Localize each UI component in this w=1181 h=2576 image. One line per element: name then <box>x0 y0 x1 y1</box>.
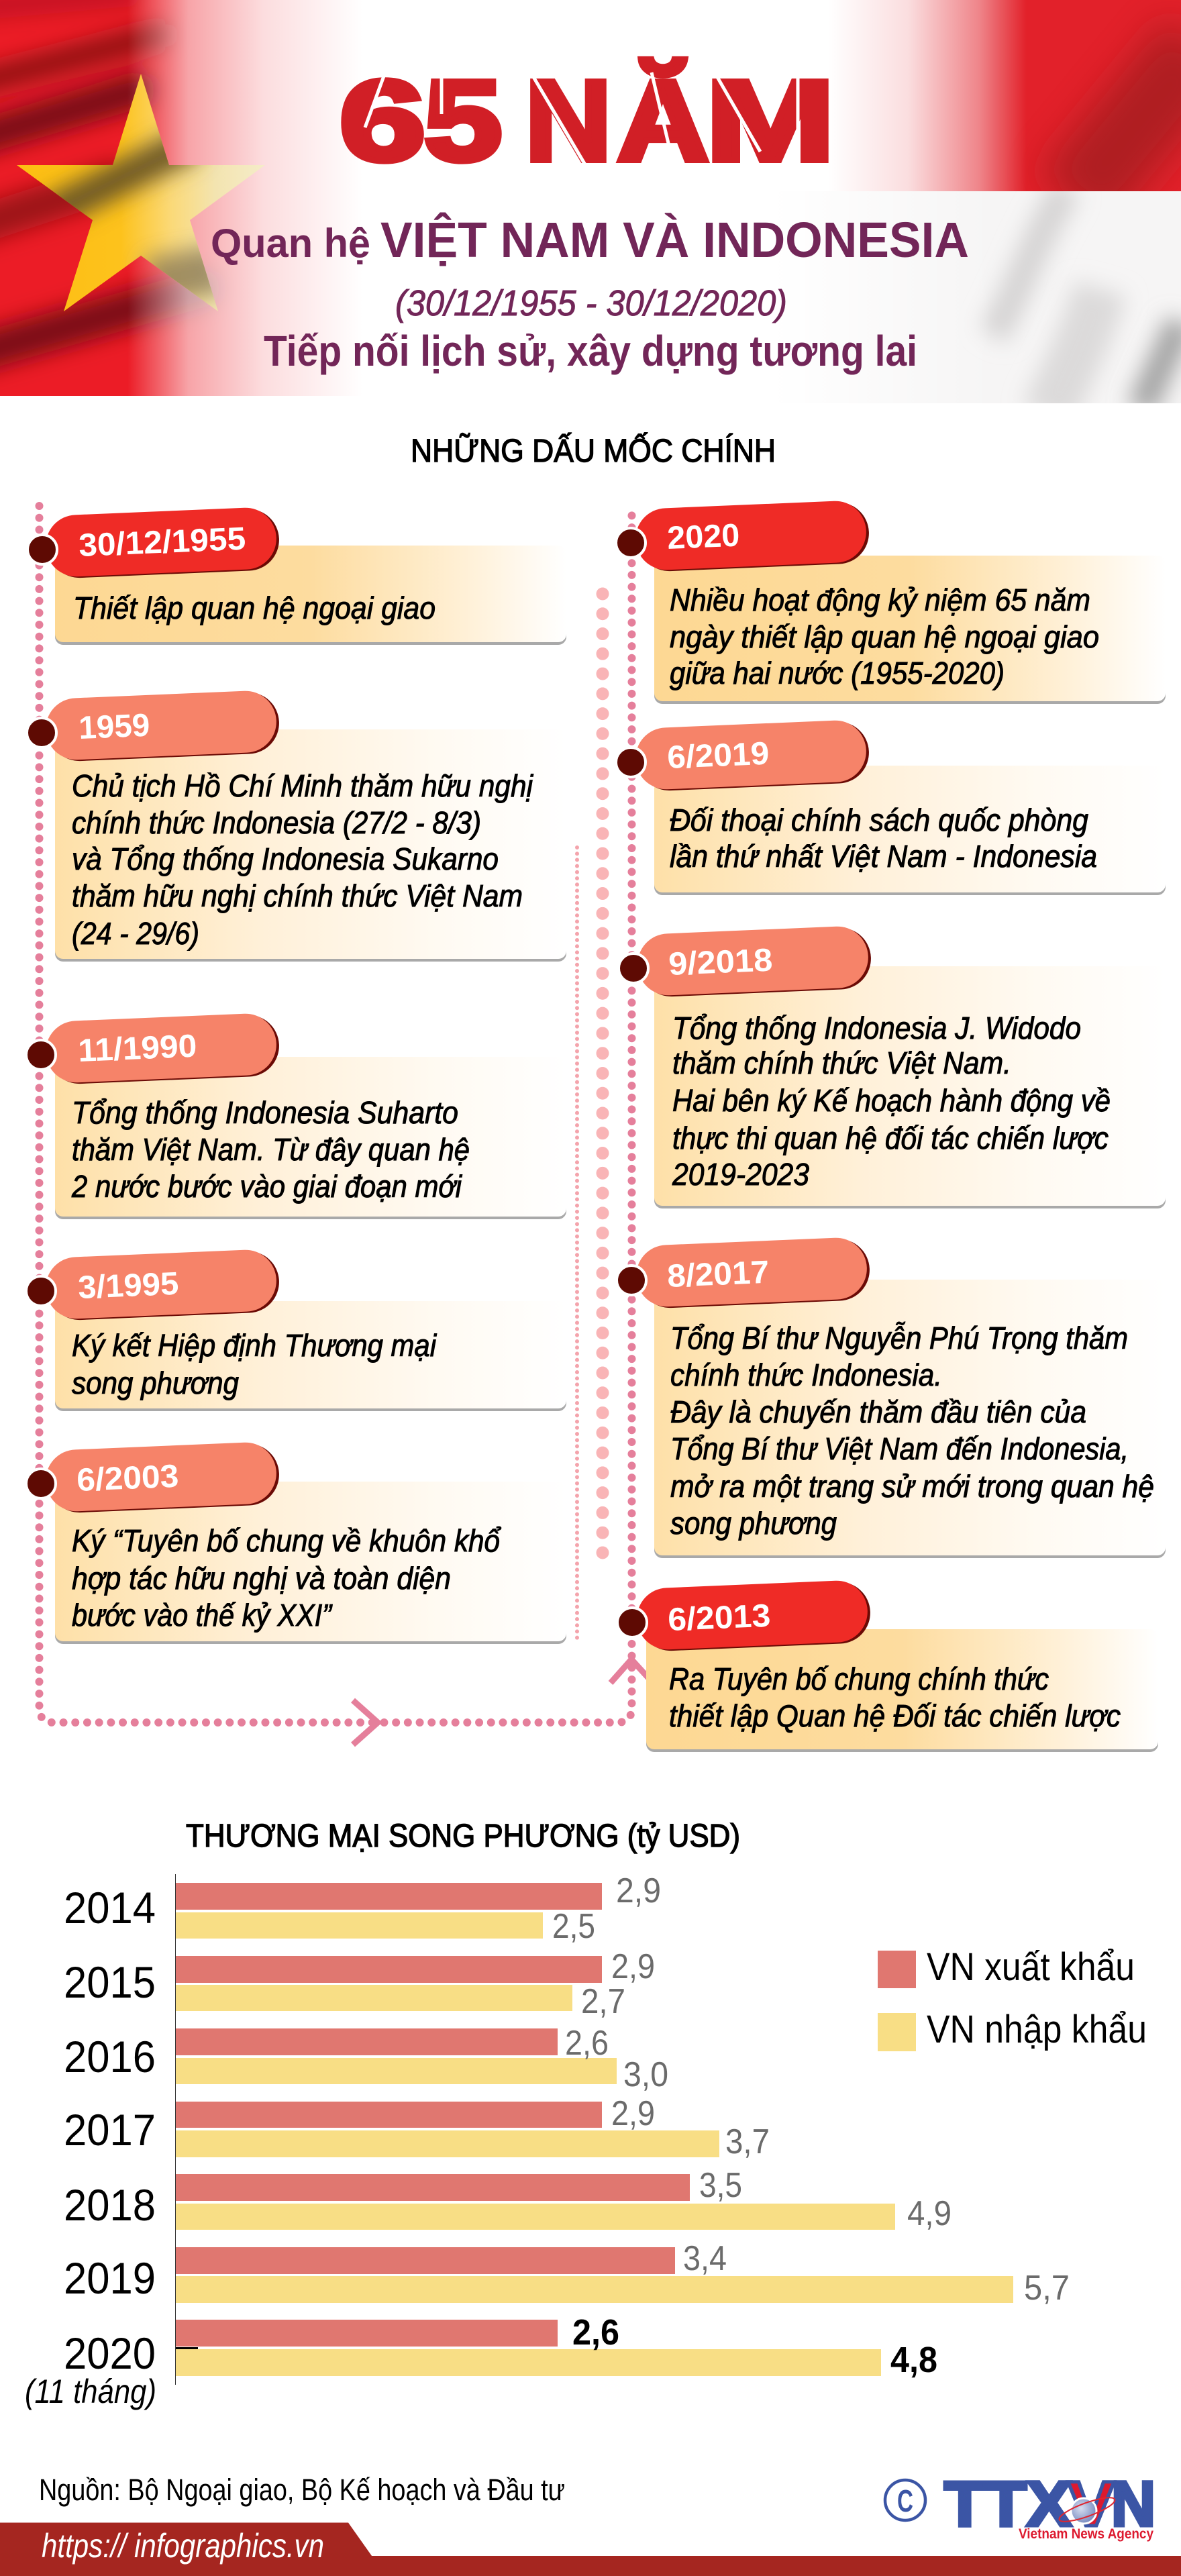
milestone: 3/1995: song phương <box>72 1366 239 1400</box>
milestone: 9/2018: thực thi quan hệ đối tác chiến lược <box>672 1121 1109 1155</box>
milestone: 8/2017: 8/2017 <box>666 1255 770 1294</box>
milestone: 9/2018 <box>619 925 1166 1208</box>
milestone: 11/1990: Tổng thống Indonesia Suharto <box>72 1095 458 1130</box>
milestone: 6/2019: 6/2019 <box>666 736 770 776</box>
milestone: 9/2018: Hai bên ký Kế hoạch hành động về <box>672 1083 1111 1118</box>
year labels: 2016 <box>64 2032 156 2081</box>
value labels: 2,5 <box>552 1907 595 1946</box>
value labels: 5,7 <box>1024 2269 1070 2308</box>
value labels: 2,6 <box>572 2312 619 2353</box>
star <box>17 74 265 311</box>
bar chart: bilateral trade <box>25 1871 1070 2410</box>
year labels: 2020 <box>64 2328 156 2378</box>
milestone: 30/12/1955 <box>28 507 566 645</box>
value labels: 2,9 <box>611 1947 655 1986</box>
flag: Vietnam <box>0 0 362 396</box>
legend <box>878 1945 1147 2051</box>
year labels <box>25 1883 156 2410</box>
small dotted separator <box>575 847 579 1641</box>
year labels: (11 tháng) <box>25 2373 156 2410</box>
logo: copyright: C <box>897 2483 913 2518</box>
milestone: 8/2017: song phương <box>670 1506 837 1541</box>
heading: milestones: NHỮNG DẤU MỐC CHÍNH <box>411 432 776 469</box>
value labels: 2,7 <box>581 1982 625 2021</box>
flag: Indonesia red band <box>848 0 1181 191</box>
year labels: 2017 <box>64 2105 156 2155</box>
milestone: 6/2003: Ký “Tuyên bố chung về khuôn khổ <box>72 1523 501 1558</box>
logo: copyright <box>885 2480 925 2520</box>
milestone: 11/1990 <box>26 1013 566 1219</box>
year labels: 2015 <box>64 1957 156 2007</box>
milestone: 6/2019: lần thứ nhất Việt Nam - Indonesia <box>670 839 1097 874</box>
header flag background <box>0 0 1181 416</box>
milestone: 2020: 2020 <box>666 518 740 556</box>
flag: Indonesia white band folds <box>949 191 1181 403</box>
milestone: 6/2013: thiết lập Quan hệ Đối tác chiến lược <box>669 1698 1121 1733</box>
value labels: 2,6 <box>565 2024 609 2063</box>
logo: globe <box>1057 2493 1117 2526</box>
milestone: 1959: 1959 <box>78 708 150 746</box>
title: 65 NĂM: M <box>706 58 835 185</box>
date range: (30/12/1955 - 30/12/2020) <box>395 283 787 323</box>
value labels: 2,9 <box>616 1871 661 1910</box>
legend: VN nhập khẩu <box>927 2008 1147 2051</box>
title: 65 NĂM: Ă <box>617 58 709 185</box>
milestone: 8/2017: Tổng Bí thư Nguyễn Phú Trọng thăm <box>670 1321 1128 1355</box>
logo: TTXVN: V <box>1068 2469 1115 2540</box>
milestone: 2020: giữa hai nước (1955-2020) <box>670 656 1005 690</box>
milestone: 6/2003: bước vào thế kỷ XXI” <box>72 1598 333 1633</box>
title: 65 NĂM: N <box>525 58 611 185</box>
milestone: 6/2019: Đối thoại chính sách quốc phòng <box>670 803 1088 837</box>
milestone: 2020 <box>616 500 1166 704</box>
value labels: 3,7 <box>725 2122 770 2161</box>
milestone: 9/2018: 9/2018 <box>668 943 773 982</box>
value labels: 3,5 <box>699 2166 742 2205</box>
subtitle: Quan hệ Việt Nam và Indonesia: Quan hệ <box>211 221 370 266</box>
milestone: 8/2017: Tổng Bí thư Việt Nam đến Indonesia, <box>670 1431 1129 1466</box>
milestone: 11/1990: 11/1990 <box>77 1029 197 1069</box>
milestone: 6/2019 <box>616 719 1166 895</box>
milestone: 6/2013: 6/2013 <box>667 1598 771 1638</box>
milestone: 6/2003 <box>26 1441 566 1644</box>
milestone: 30/12/1955: Thiết lập quan hệ ngoại giao <box>73 590 435 625</box>
milestone: 6/2013 <box>617 1580 1158 1752</box>
timeline connector <box>39 506 632 1722</box>
tagline: Tiếp nối lịch sử, xây dựng tương lai <box>264 327 917 375</box>
value labels: 3,0 <box>623 2055 668 2094</box>
bars: 2016 <box>176 2028 617 2084</box>
milestone: 1959: chính thức Indonesia (27/2 - 8/3) <box>72 805 481 840</box>
bars: 2015 <box>176 1956 602 2011</box>
title: 65 NĂM <box>340 58 835 185</box>
milestone: 3/1995: 3/1995 <box>77 1266 179 1306</box>
footer url: https:// infographics.vn <box>42 2527 324 2565</box>
milestone: 1959: Chủ tịch Hồ Chí Minh thăm hữu nghị <box>72 768 534 803</box>
large dotted separator <box>596 594 609 1553</box>
milestone: 2020: Nhiều hoạt động kỷ niệm 65 năm <box>670 582 1090 617</box>
year labels: 2019 <box>64 2253 156 2303</box>
logo: TTXVN <box>944 2469 1156 2542</box>
milestone: 11/1990: thăm Việt Nam. Từ đây quan hệ <box>72 1132 470 1167</box>
milestone: 9/2018: Tổng thống Indonesia J. Widodo <box>672 1011 1081 1045</box>
milestone: 1959: thăm hữu nghị chính thức Việt Nam <box>72 878 523 913</box>
milestone: 6/2003: 6/2003 <box>76 1459 179 1498</box>
logo: TTXVN: N <box>1111 2469 1156 2540</box>
milestone: 6/2003: hợp tác hữu nghị và toàn diện <box>72 1561 451 1596</box>
legend: VN xuất khẩu <box>927 1945 1135 1989</box>
bars: 2020 <box>176 2320 881 2376</box>
bars: 2018 <box>176 2174 895 2230</box>
milestone: 8/2017 <box>617 1237 1166 1558</box>
source: Nguồn: Bộ Ngoại giao, Bộ Kế hoạch và Đầu tư <box>39 2473 565 2507</box>
title: 65 NĂM: 5 <box>424 58 502 185</box>
value labels: 4,9 <box>907 2194 952 2233</box>
year labels: 2018 <box>64 2180 156 2230</box>
value labels: 4,8 <box>890 2340 937 2380</box>
bars: 2014 <box>176 1883 602 1939</box>
milestone: 1959 <box>27 690 566 962</box>
milestone: 9/2018: 2019-2023 <box>672 1157 809 1192</box>
chart title: THƯƠNG MẠI SONG PHƯƠNG (tỷ USD) <box>186 1818 740 1854</box>
milestone: 30/12/1955: 30/12/1955 <box>78 521 246 564</box>
logo: TTXVN: TTX <box>944 2469 1072 2540</box>
title: 65 NĂM: 6 <box>340 58 425 185</box>
year labels: 2014 <box>64 1883 156 1933</box>
milestone: 2020: ngày thiết lập quan hệ ngoại giao <box>670 619 1099 654</box>
footer band <box>0 2523 1181 2576</box>
value labels: 3,4 <box>683 2239 727 2278</box>
milestone: 8/2017: Đây là chuyến thăm đầu tiên của <box>670 1394 1086 1429</box>
arrow: right <box>353 1700 378 1745</box>
milestone: 6/2013: Ra Tuyên bố chung chính thức <box>669 1661 1049 1696</box>
subtitle: Quan hệ Việt Nam và Indonesia: VIỆT NAM VÀ INDONESIA <box>380 212 969 268</box>
milestone: 3/1995 <box>26 1249 566 1411</box>
arrow: up <box>611 1659 653 1683</box>
milestone: 8/2017: chính thức Indonesia. <box>670 1357 942 1392</box>
bars: 2017 <box>176 2102 719 2157</box>
milestone: 11/1990: 2 nước bước vào giai đoạn mới <box>71 1169 463 1204</box>
value labels <box>552 1871 1070 2380</box>
milestone: 8/2017: mở ra một trang sử mới trong quan hệ <box>670 1469 1154 1504</box>
milestone: 3/1995: Ký kết Hiệp định Thương mại <box>72 1328 438 1363</box>
logo: agency name: Vietnam News Agency <box>1019 2526 1153 2542</box>
bars: 2019 <box>176 2247 1013 2303</box>
value labels: 2,9 <box>611 2094 655 2133</box>
milestone: 1959: (24 - 29/6) <box>72 916 199 951</box>
milestone: 9/2018: thăm chính thức Việt Nam. <box>672 1045 1011 1080</box>
milestone: 1959: và Tổng thống Indonesia Sukarno <box>72 841 499 876</box>
